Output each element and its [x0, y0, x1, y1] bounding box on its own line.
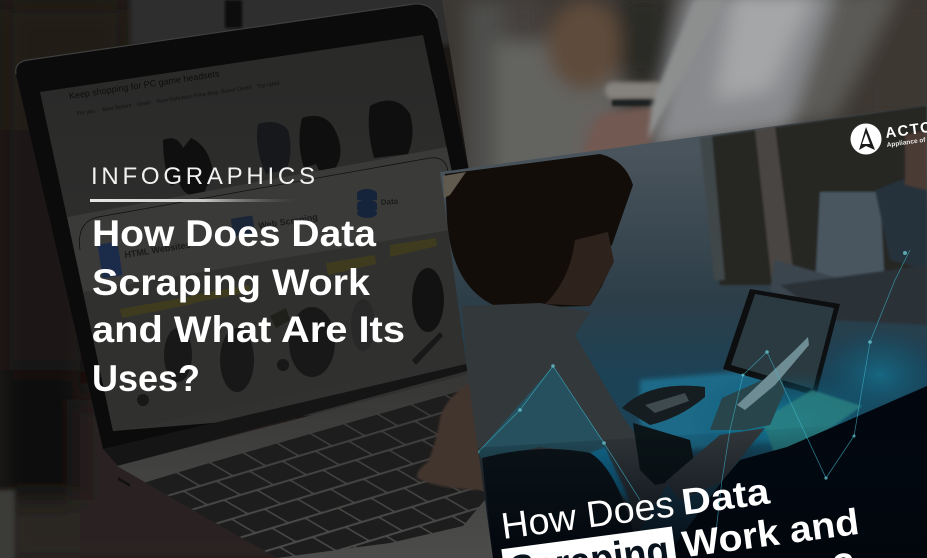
card photo: hair and face [443, 154, 633, 308]
label: html websites: HTML Websites [124, 240, 191, 260]
screen text: shopping header: Price-drop [193, 90, 219, 100]
blurred person in upper right [442, 0, 927, 168]
card title line 1: How Does [499, 483, 677, 547]
card photo: tablet on desk [723, 289, 840, 396]
lower bezel highlight [103, 356, 500, 466]
card photo: wall [440, 105, 927, 558]
screen text: shopping header [69, 72, 279, 115]
finger on keyboard [417, 378, 490, 490]
card title [501, 483, 858, 558]
card title line 2 [501, 508, 858, 558]
main heading: and What Are Its [92, 309, 405, 350]
label: web scraping: Web Scraping [258, 212, 318, 231]
card photo: arm and sleeve [633, 423, 765, 500]
logo tagline: Appliance of [886, 137, 927, 149]
card photo: office background [700, 105, 927, 325]
screen text: shopping header: New Releases [156, 94, 193, 105]
screen text: shopping header: Keep shopping for PC game headsets [68, 68, 221, 101]
infographic card [440, 105, 927, 558]
database icon [357, 189, 377, 218]
main heading: Uses? [92, 358, 200, 399]
main heading: Scraping Work [92, 262, 370, 303]
screen text: shopping header: Deals [137, 100, 152, 108]
card photo: person body [462, 303, 667, 530]
logo badge [850, 124, 882, 154]
card photo: dark lower section [440, 386, 927, 558]
html icon [97, 242, 123, 278]
keys [143, 388, 510, 558]
screen text: shopping header: Best Sellers [102, 103, 132, 113]
laptop keyboard deck [117, 366, 510, 558]
card title line 1: Data [679, 471, 772, 523]
usb port [118, 477, 130, 487]
laptop screen [40, 35, 468, 431]
label: data: Data [381, 197, 399, 207]
main heading: How Does Data [92, 213, 376, 254]
card logo [850, 119, 927, 154]
lower product grid [120, 238, 444, 406]
section underline [90, 199, 297, 202]
card photo: hands and phone [622, 337, 809, 430]
section label: INFOGRAPHICS [91, 163, 315, 190]
screen text: shopping header: Brand Outlet [221, 85, 253, 95]
card photo: teal desk glow [478, 325, 927, 505]
screen text: shopping header: Top rated [256, 81, 280, 90]
browser icon [231, 215, 255, 237]
data line network [477, 250, 910, 540]
laptop lid [16, 4, 510, 466]
card photo: blue desk [640, 370, 790, 450]
card title line 1 [502, 483, 771, 539]
main heading [92, 213, 405, 399]
pipeline panel [67, 147, 480, 292]
screen text: shopping header: For you [76, 108, 96, 117]
headset product row [163, 101, 413, 196]
